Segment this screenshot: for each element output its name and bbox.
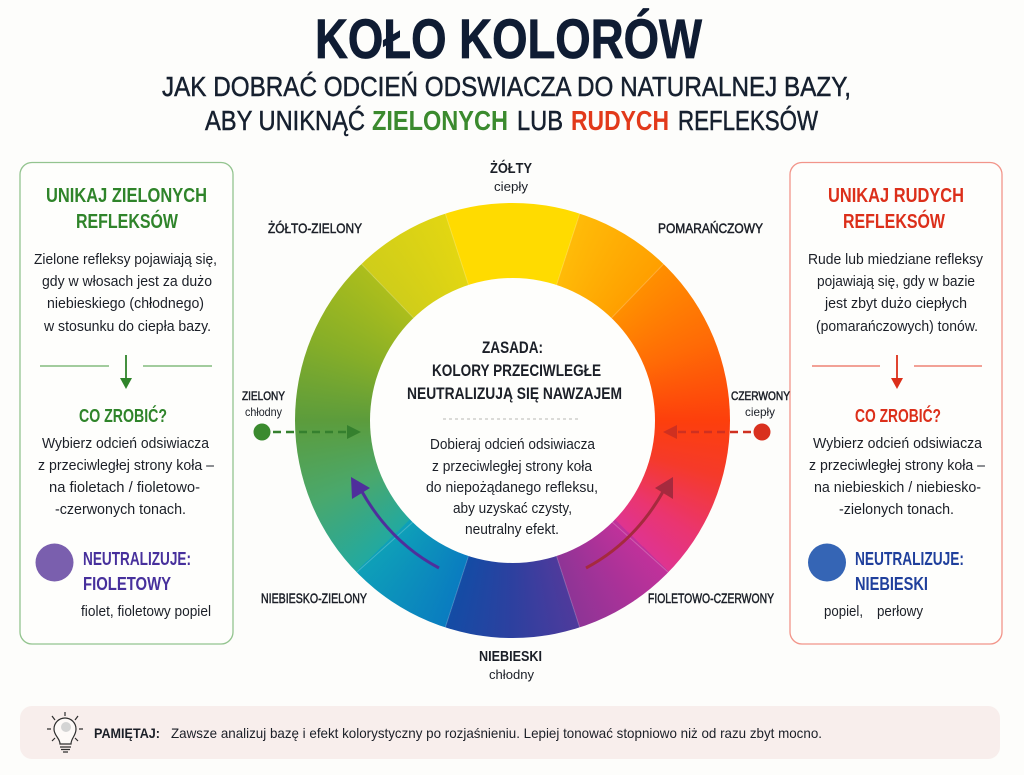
heading: what to do: CO ZROBIĆ? (79, 405, 167, 426)
text: advice violet: na fioletach / fioletowo- (49, 479, 200, 496)
footer text: Zawsze analizuj bazę i efekt kolorystyczny po rozjaśnieniu. Lepiej tonować stopniowo niż od razu zbyt mocno. (171, 725, 822, 741)
subtitle: ZIELONYCH (372, 105, 508, 136)
heading: avoid green: UNIKAJ ZIELONYCH (46, 185, 207, 207)
text: why green appears: w stosunku do ciepła bazy. (43, 318, 211, 335)
text: advice blue: na niebieskich / niebiesko- (814, 479, 981, 496)
subtitle: JAK DOBRAĆ ODCIEŃ ODSWIACZA DO NATURALNEJ BAZY, (162, 71, 851, 102)
wheel label: green (242, 389, 285, 419)
arrow: violet curved (351, 477, 439, 568)
center text: rule explanation: neutralny efekt. (465, 521, 559, 538)
text: why green appears: gdy w włosach jest za dużo (42, 273, 212, 290)
wheel label: blue: chłodny (489, 667, 534, 682)
text: why red appears: Rude lub miedziane refleksy (808, 251, 983, 268)
text: why red appears: pojawiają się, gdy w bazie (817, 273, 975, 290)
center text: rule explanation: do niepożądanego refleksu, (426, 479, 598, 496)
heading: avoid green: REFLEKSÓW (76, 209, 178, 233)
arrow: red dashed (663, 424, 770, 440)
text: advice blue (809, 435, 986, 518)
center text: rule explanation: aby uzyskać czysty, (453, 500, 572, 517)
title: KOŁO KOLORÓW (315, 7, 702, 70)
center text: rule explanation: Dobieraj odcień odsiwiacza (430, 436, 596, 453)
neutralizer label: blue: NEUTRALIZUJE: (855, 549, 964, 569)
wheel label: green: chłodny (245, 405, 282, 419)
icon: light bulb (47, 712, 83, 752)
text: advice blue: z przeciwległej strony koła – (809, 457, 986, 474)
arrow: green dashed (254, 424, 361, 440)
text: why red appears: (pomarańczowych) tonów. (816, 318, 978, 335)
text: why green appears (34, 251, 217, 335)
center text: rule explanation: z przeciwległej strony koła (432, 458, 593, 475)
center heading: rule: KOLORY PRZECIWLEGŁE (432, 361, 601, 380)
wheel label: orange: POMARAŃCZOWY (658, 220, 764, 236)
wheel label: red: CZERWONY (731, 389, 790, 403)
heading: avoid red: UNIKAJ RUDYCH (828, 185, 964, 207)
neutralizer label: blue: NIEBIESKI (855, 574, 928, 594)
text: violet shades: fiolet, fioletowy popiel (81, 603, 211, 620)
wheel label: yellow-green: ŻÓŁTO-ZIELONY (268, 219, 363, 236)
arrow: green down with divider (40, 355, 212, 389)
subtitle: RUDYCH (571, 105, 669, 136)
color wheel (295, 203, 730, 638)
neutralizer label: blue (855, 549, 964, 594)
arrow: red curved (586, 477, 673, 568)
text: advice violet: z przeciwległej strony koła – (38, 457, 215, 474)
heading: what to do: CO ZROBIĆ? (855, 405, 941, 426)
center heading: rule: ZASADA: (482, 338, 543, 357)
text: advice blue: -zielonych tonach. (839, 501, 954, 518)
center heading: rule (407, 338, 622, 403)
icon: blue swatch (808, 544, 846, 582)
wheel label: yellow (490, 159, 532, 194)
wheel label: blue-green: NIEBIESKO-ZIELONY (261, 590, 367, 606)
wheel label: blue: NIEBIESKI (479, 648, 542, 665)
wheel label: red (731, 389, 790, 419)
subtitle: ABY UNIKNĄĆ (205, 105, 365, 136)
text: why green appears: Zielone refleksy pojawiają się, (34, 251, 217, 268)
panel: avoid green reflections (20, 162, 233, 644)
center heading: rule: NEUTRALIZUJĄ SIĘ NAWZAJEM (407, 384, 622, 403)
subtitle: REFLEKSÓW (678, 105, 818, 136)
wheel label: yellow: ciepły (494, 179, 528, 194)
center text: rule explanation (426, 436, 598, 538)
text: blue shades: perłowy (877, 603, 923, 620)
text: advice violet (38, 435, 215, 518)
wheel label: red: ciepły (745, 405, 775, 419)
text: why red appears: jest zbyt dużo ciepłych (824, 295, 967, 312)
wheel label: blue (479, 648, 542, 682)
wheel label: yellow: ŻÓŁTY (490, 159, 532, 177)
wheel label: green: ZIELONY (242, 389, 285, 403)
heading: avoid red (828, 185, 964, 233)
text: why green appears: niebieskiego (chłodnego) (47, 295, 204, 312)
text: advice violet: -czerwonych tonach. (55, 501, 186, 518)
text: why red appears (808, 251, 983, 335)
footer callout (20, 706, 1000, 759)
subtitle (162, 71, 851, 136)
subtitle: LUB (517, 105, 563, 136)
heading: avoid green (46, 185, 207, 233)
text: blue shades (824, 603, 923, 620)
icon: violet swatch (36, 544, 74, 582)
text: blue shades: popiel, (824, 603, 863, 620)
panel: avoid red reflections (790, 162, 1002, 644)
text: advice violet: Wybierz odcień odsiwiacza (42, 435, 210, 452)
heading: avoid red: REFLEKSÓW (843, 209, 945, 233)
wheel label: violet-red: FIOLETOWO-CZERWONY (648, 590, 774, 606)
neutralizer label: violet (83, 549, 191, 594)
neutralizer label: violet: NEUTRALIZUJE: (83, 549, 191, 569)
footer label: PAMIĘTAJ: (94, 725, 160, 741)
text: advice blue: Wybierz odcień odsiwiacza (813, 435, 983, 452)
arrow: red down with divider (812, 355, 982, 389)
neutralizer label: violet: FIOLETOWY (83, 574, 171, 594)
